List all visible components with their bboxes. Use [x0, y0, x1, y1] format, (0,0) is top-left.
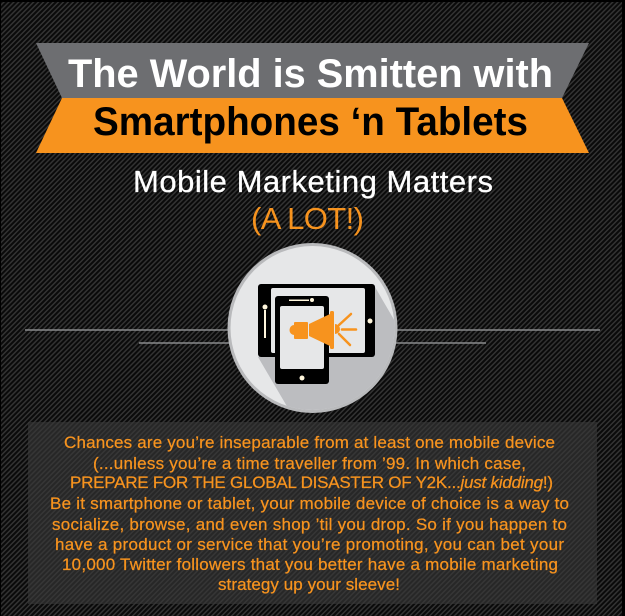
megaphone	[290, 311, 356, 349]
body text: have a product or service that you’re promoting, you can bet your	[55, 535, 564, 554]
title line 1: The World is Smitten with	[68, 52, 553, 96]
phone	[275, 296, 329, 384]
body text: 10,000 Twitter followers that you better have a mobile marketing	[62, 555, 558, 574]
title line 2: Smartphones ‘n Tablets	[93, 100, 528, 144]
orange ribbon	[36, 98, 589, 153]
body text	[50, 433, 569, 594]
subtitle: Mobile Marketing Matters	[133, 164, 493, 199]
tablet	[258, 284, 375, 357]
body text: Chances are you’re inseparable from at least one mobile device	[64, 433, 555, 452]
icon: devices with megaphone	[228, 243, 398, 413]
body text: strategy up your sleeve!	[218, 575, 400, 594]
body text: socialize, browse, and even shop ’til you drop. So if you happen to	[52, 515, 567, 534]
title banner	[36, 43, 589, 153]
divider lines	[25, 330, 600, 343]
circle badge	[228, 243, 398, 413]
body text: (...unless you’re a time traveller from ’99. In which case,	[93, 454, 526, 473]
grey ribbon	[36, 43, 589, 98]
body text: Be it smartphone or tablet, your mobile device of choice is a way to	[50, 494, 569, 513]
long shadow	[258, 287, 394, 410]
subtitle emphasis: (A LOT!)	[251, 201, 364, 236]
body text: PREPARE FOR THE GLOBAL DISASTER OF Y2K...just kidding!)	[70, 473, 553, 492]
panel: intro text	[28, 422, 597, 604]
